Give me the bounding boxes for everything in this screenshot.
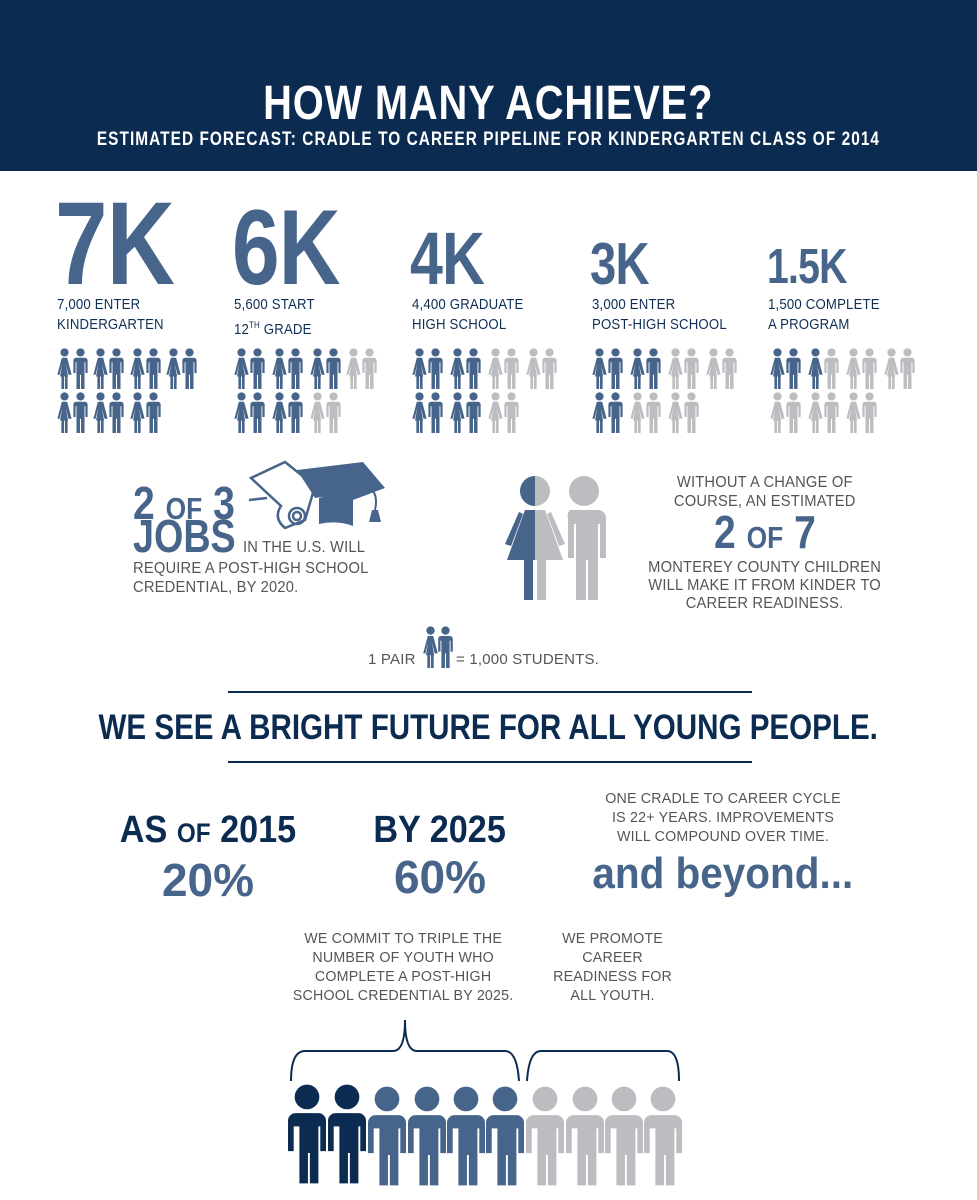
stat: 6K: 6K [232, 187, 340, 307]
stat: 7K: 7,000 ENTER [57, 296, 140, 313]
heading: bright future: WE SEE A BRIGHT FUTURE FOR ALL YOUNG PEOPLE. [99, 708, 878, 747]
icon: 3K pairs [592, 348, 737, 433]
icon: 1.5K pairs [770, 348, 915, 433]
text: promote career readiness: READINESS FOR [553, 968, 672, 985]
callout: 2 of 3 jobs: JOBS [133, 510, 236, 562]
stat: 3K [590, 231, 727, 333]
text: promote career readiness [553, 930, 672, 1004]
stat: as of 2015 20% [120, 809, 296, 906]
stat: and beyond: WILL COMPOUND OVER TIME. [617, 828, 829, 845]
text: commit to triple: COMPLETE A POST-HIGH [315, 968, 491, 985]
text: CAREER READINESS. [686, 595, 844, 612]
stat: by 2025 60%: 60% [394, 851, 486, 903]
stat: and beyond: IS 22+ YEARS. IMPROVEMENTS [612, 809, 834, 826]
icon: graduation cap and diploma [248, 460, 385, 530]
text: commit to triple: WE COMMIT TO TRIPLE THE [304, 930, 502, 947]
callout: 2 of 3 jobs [133, 477, 368, 596]
pictogram rows [57, 348, 915, 433]
stat: 4K: 4,400 GRADUATE [412, 296, 524, 313]
icon: half-filled pair [505, 476, 606, 600]
callout: 2 of 3 jobs: IN THE U.S. WILL [243, 539, 365, 556]
callout: 2 of 3 jobs: REQUIRE A POST-HIGH SCHOOL [133, 560, 368, 577]
stat: 3K: 3K [590, 231, 649, 297]
text: commit to triple: NUMBER OF YOUTH WHO [312, 949, 494, 966]
callout: 2 of 7: MONTEREY COUNTY CHILDREN [649, 559, 881, 576]
stat: as of 2015 20%: AS OF 2015 [120, 809, 296, 851]
icon: 4K pairs [412, 348, 557, 433]
bottom figures row [288, 1084, 682, 1186]
stat: as of 2015 20%: 20% [162, 854, 254, 906]
callout: 2 of 3 jobs: CREDENTIAL, BY 2020. [133, 579, 298, 596]
stat: 6K: 5,600 START [234, 296, 315, 313]
icon: 7K pairs [57, 348, 197, 433]
callout: 2 of 7: 2 OF 7 [714, 506, 816, 558]
text: promote career readiness: WE PROMOTE [562, 930, 663, 947]
subtitle: ESTIMATED FORECAST: CRADLE TO CAREER PIPELINE FOR KINDERGARTEN CLASS OF 2014 [97, 129, 880, 150]
stat: and beyond: and beyond... [593, 849, 853, 898]
text: promote career readiness: ALL YOUTH. [570, 987, 655, 1004]
title: HOW MANY ACHIEVE? [263, 77, 714, 130]
callout: 2 of 3 jobs: 2 OF 3 [133, 477, 235, 529]
stat: 3K: 3,000 ENTER [592, 296, 675, 313]
text: commit to triple: SCHOOL CREDENTIAL BY 2025. [293, 987, 513, 1004]
legend: 1 pair = 1000 students: = 1,000 STUDENTS. [456, 651, 599, 668]
stat: 1.5K: A PROGRAM [768, 316, 850, 333]
stat: by 2025 60%: BY 2025 [374, 809, 506, 851]
stat: 4K: HIGH SCHOOL [412, 316, 506, 333]
header banner [0, 0, 977, 171]
stat: by 2025 60% [374, 809, 506, 903]
legend: 1 pair = 1000 students [368, 626, 599, 668]
stat: 7K: 7K [55, 178, 174, 310]
callout: 2 of 7 [648, 474, 881, 612]
icon: 6K pairs [234, 348, 377, 433]
text: promote career readiness: CAREER [582, 949, 643, 966]
stat: and beyond [593, 790, 853, 898]
stat: 6K: 12TH GRADE [234, 320, 312, 338]
stat: 4K: 4K [410, 217, 484, 300]
stat: and beyond: ONE CRADLE TO CAREER CYCLE [605, 790, 841, 807]
stat: 1.5K: 1.5K [767, 240, 847, 294]
stat: 3K: POST-HIGH SCHOOL [592, 316, 727, 333]
stat: 1.5K [767, 240, 880, 333]
callout: 2 of 7: WILL MAKE IT FROM KINDER TO [649, 577, 881, 594]
stat: 4K [410, 217, 524, 333]
callout: 2 of 7: WITHOUT A CHANGE OF [677, 474, 853, 491]
stat: 1.5K: 1,500 COMPLETE [768, 296, 880, 313]
callout: 2 of 7: COURSE, AN ESTIMATED [674, 493, 856, 510]
legend: 1 pair = 1000 students: 1 PAIR [368, 651, 416, 668]
text: commit to triple [293, 930, 513, 1004]
stat: 7K: KINDERGARTEN [57, 316, 164, 333]
braces [290, 1020, 680, 1082]
